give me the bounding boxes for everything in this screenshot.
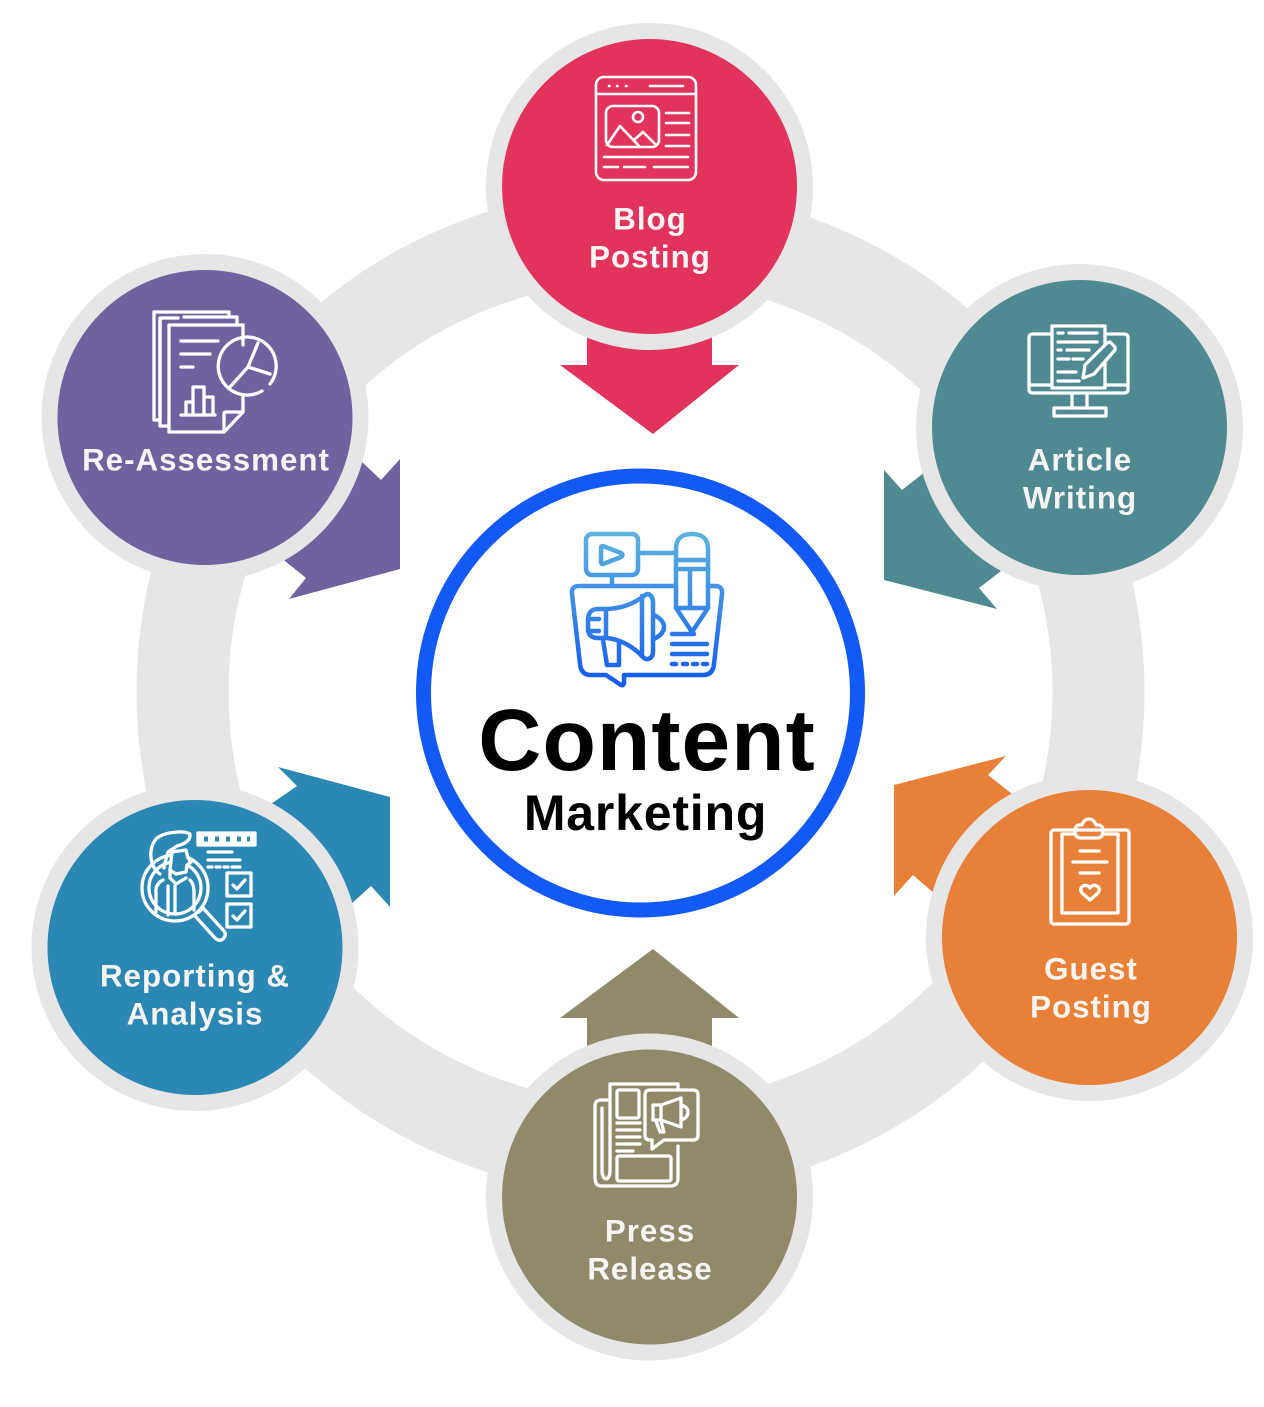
arrow: blog posting to centre	[560, 330, 739, 434]
label: Guest Posting: Guest	[1044, 952, 1138, 986]
icon: reports with pie chart	[154, 312, 276, 432]
label: Article Writing: Article	[1028, 442, 1132, 478]
label: Press Release: Release	[587, 1252, 713, 1286]
label: Guest Posting: Posting	[1030, 990, 1152, 1024]
icon: clipboard with heart	[1051, 819, 1129, 924]
arrow: article writing to centre	[884, 468, 1001, 609]
node: article writing	[924, 272, 1235, 583]
arrow: reporting and analysis to centre	[268, 767, 390, 907]
label: Blog Posting: Blog	[613, 202, 687, 236]
centre circle	[424, 476, 858, 910]
label: Blog Posting: Posting	[589, 240, 711, 274]
icon: web page with image	[596, 77, 696, 180]
node: guest posting	[934, 782, 1245, 1093]
label: Press Release: Press	[605, 1214, 695, 1248]
icon: person in magnifier with checklist	[142, 832, 255, 940]
label: Article Writing: Writing	[1023, 480, 1137, 516]
icon: newspaper with megaphone	[595, 1084, 698, 1186]
label: Reporting & Analysis: Reporting &	[100, 958, 290, 994]
icon: monitor with document and pencil	[1029, 326, 1128, 416]
node: re-assessment	[50, 262, 360, 573]
arrow: re-assessment to centre	[280, 459, 400, 599]
subtitle: Marketing: Marketing	[524, 785, 767, 841]
node: press release	[494, 1042, 805, 1352]
label: Re-Assessment: Re-Assessment	[82, 442, 330, 478]
arrow: guest posting to centre	[894, 756, 1016, 896]
node: reporting and analysis	[40, 792, 350, 1103]
node: blog posting	[494, 31, 805, 342]
title: Content: Content	[478, 691, 816, 789]
icon: content marketing megaphone, video and pencil	[572, 534, 722, 685]
grey cycle ring	[182, 234, 1098, 1150]
label: Reporting & Analysis: Analysis	[127, 996, 263, 1032]
arrow: press release to centre	[560, 949, 739, 1060]
